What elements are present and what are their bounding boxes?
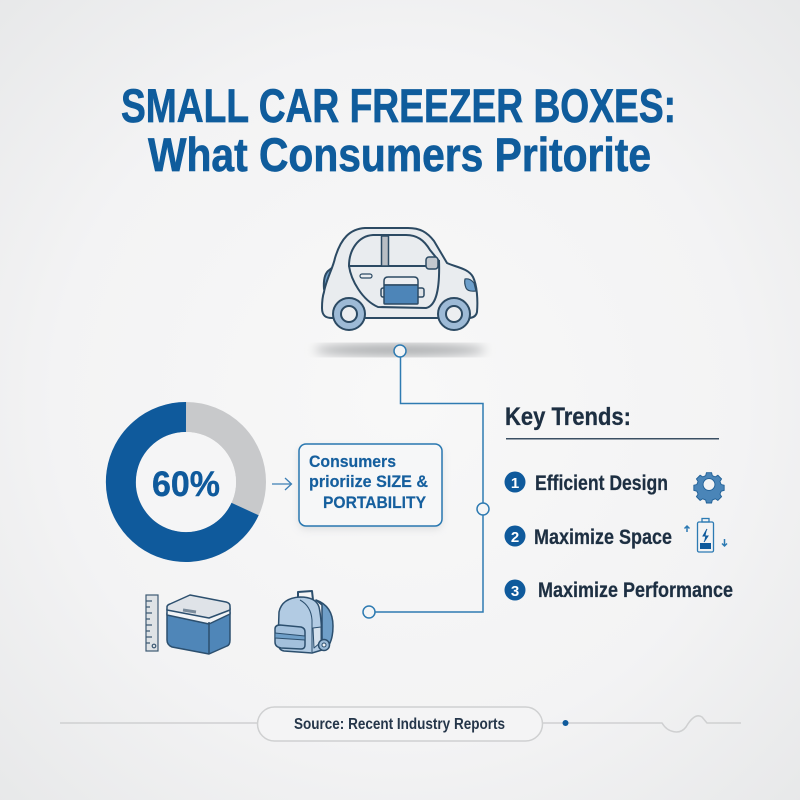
trend 1: 1 (511, 475, 519, 492)
source pill: Source: Recent Industry Reports (294, 716, 505, 733)
trend 2: Maximize Space (534, 526, 672, 549)
title: What Consumers Pritorite (148, 128, 651, 181)
callout: Consumers (309, 452, 396, 471)
icon: backpack (275, 591, 333, 653)
trend 1 (504, 472, 668, 495)
callout (299, 444, 442, 529)
trend 3: Maximize Performance (538, 579, 733, 602)
connector lines (363, 345, 489, 618)
icon: ruler (146, 595, 158, 651)
icon: cooler (167, 595, 230, 654)
trend 1: Efficient Design (535, 472, 668, 495)
callout: PORTABILITY (323, 493, 427, 512)
arrow (272, 478, 292, 490)
trend 2: 2 (511, 529, 519, 546)
callout: prioriize SIZE & (309, 472, 428, 491)
donut value: 60% (152, 465, 220, 504)
car shadow (314, 344, 486, 356)
icon: gear (694, 473, 724, 503)
trend 3: 3 (511, 583, 519, 600)
donut chart: 60% (121, 417, 251, 547)
source pill (258, 707, 542, 741)
icon: car with freezer box (322, 228, 477, 330)
heading: key trends: Key Trends: (505, 403, 631, 431)
icon: cooler in car (381, 277, 424, 304)
footer line (60, 716, 741, 732)
icon: battery with arrows (684, 518, 727, 552)
title (121, 79, 676, 181)
